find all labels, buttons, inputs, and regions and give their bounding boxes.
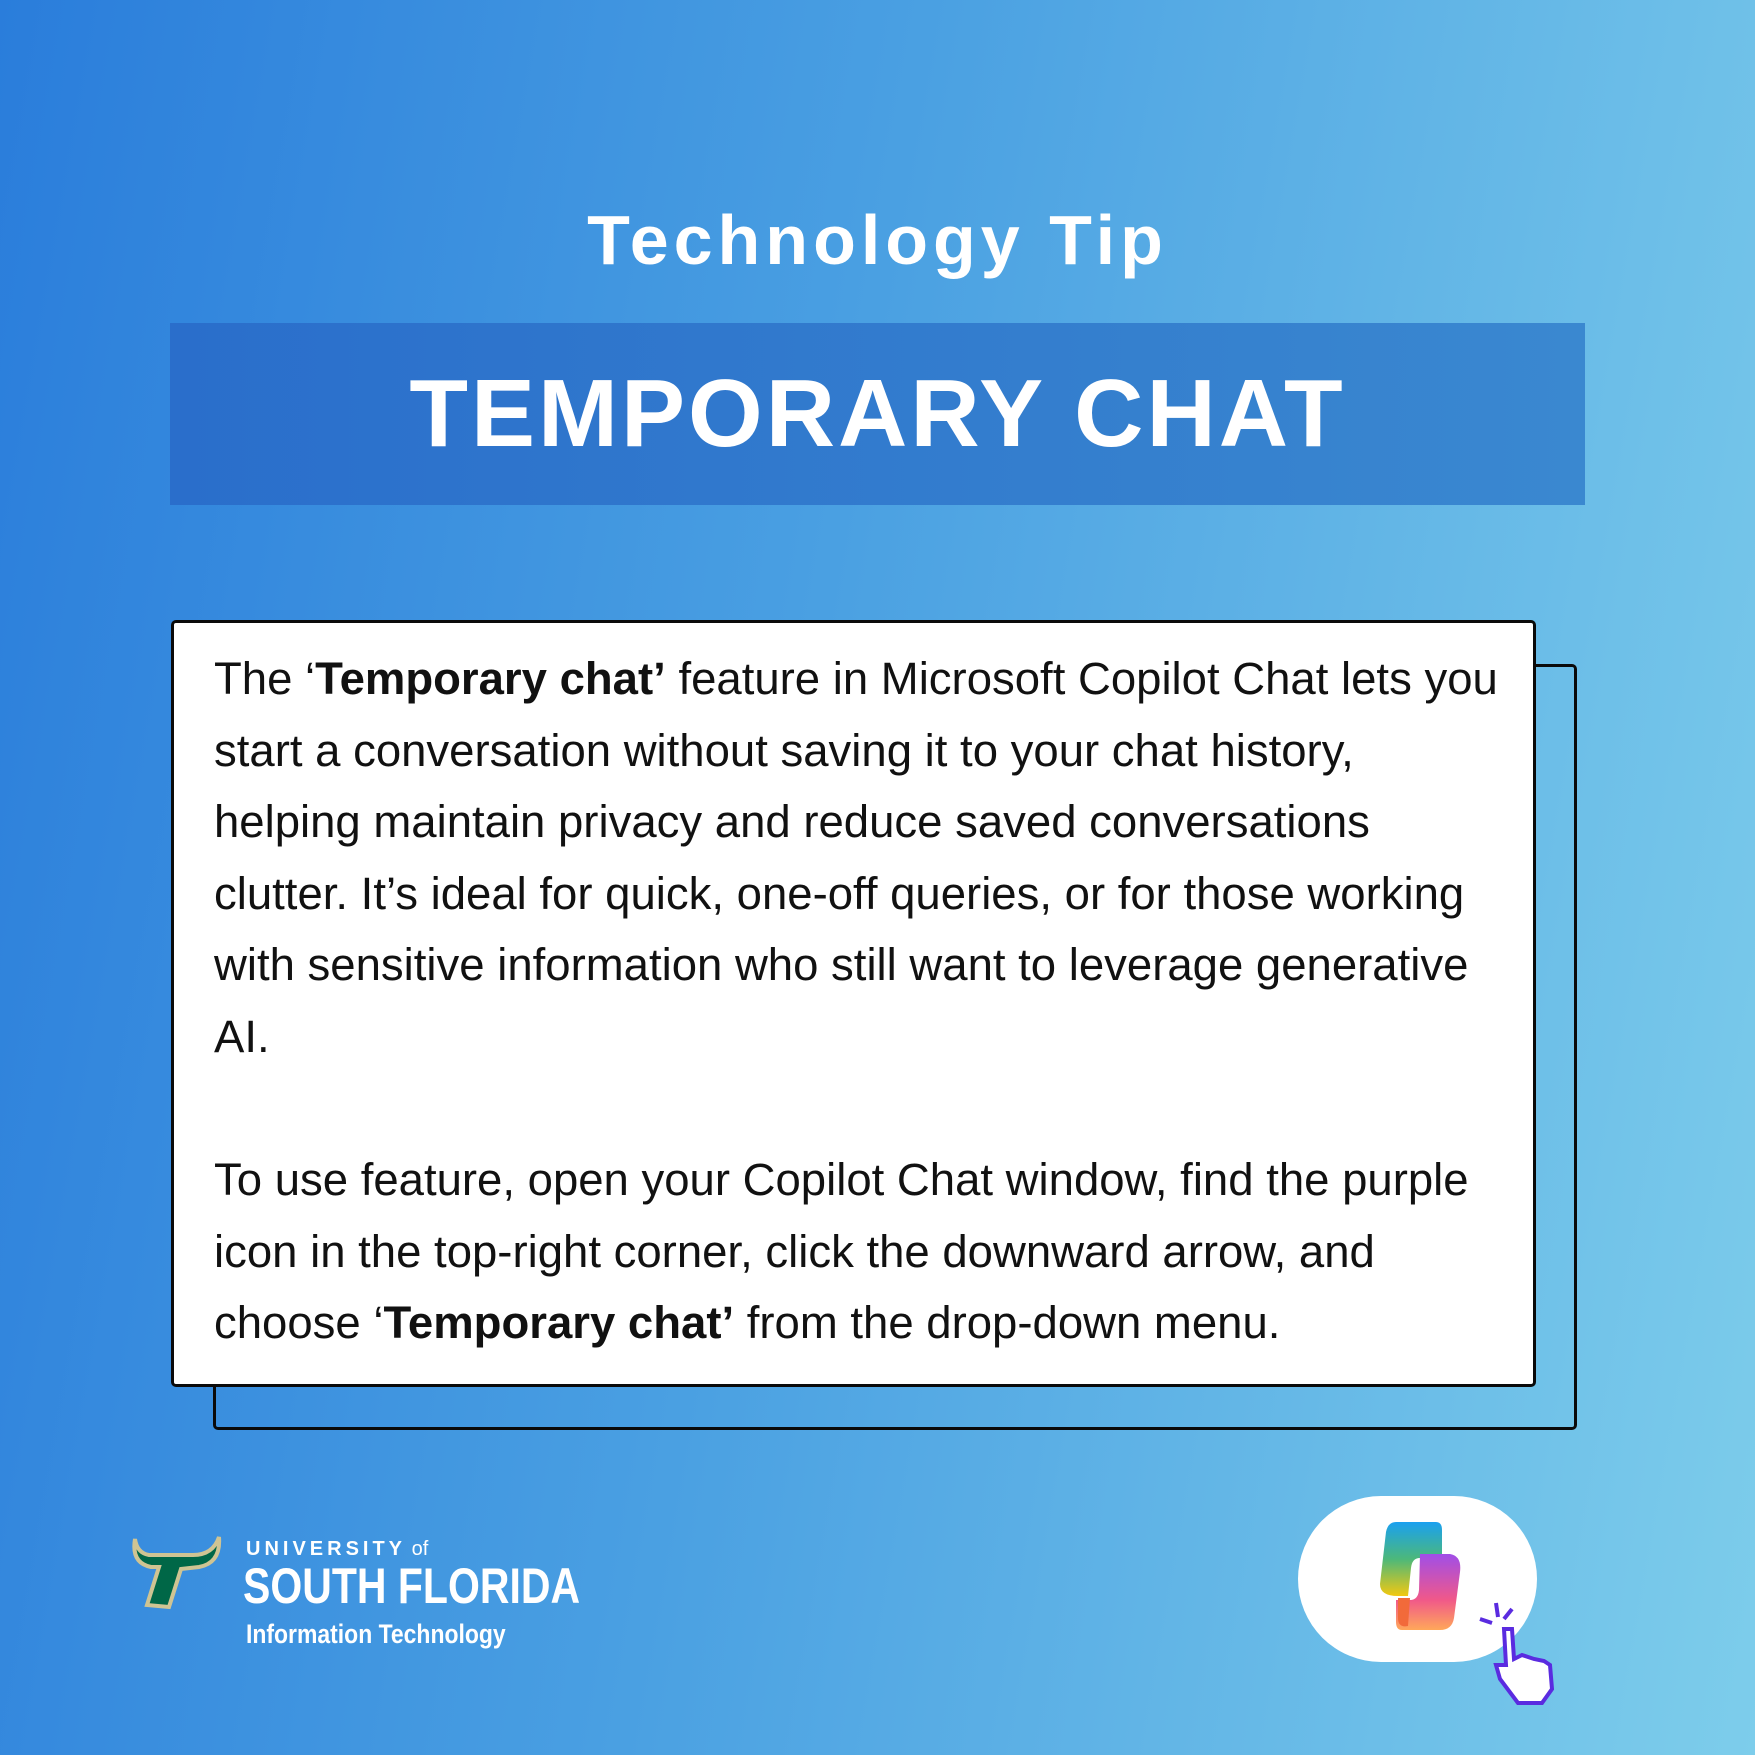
- body text: choose ‘Temporary chat’ from the drop-down menu.: [214, 1297, 1280, 1348]
- body text: To use feature, open your Copilot Chat window, find the purple: [214, 1154, 1469, 1205]
- logo: USF Information Technology: [132, 1536, 580, 1649]
- banner: Temporary Chat: [170, 323, 1585, 505]
- body text: [214, 653, 1498, 1348]
- heading: TEMPORARY CHAT: [409, 360, 1346, 467]
- text: Information Technology: Information Technology: [246, 1619, 506, 1649]
- panel: text card: [171, 620, 1536, 1387]
- body text: AI.: [214, 1011, 270, 1062]
- body text: with sensitive information who still want to leverage generative: [214, 939, 1468, 990]
- body text: helping maintain privacy and reduce saved conversations: [214, 796, 1370, 847]
- body text: clutter. It’s ideal for quick, one-off queries, or for those working: [214, 868, 1464, 919]
- icon: Copilot pill with cursor: [1298, 1496, 1554, 1705]
- body text: start a conversation without saving it to your chat history,: [214, 725, 1354, 776]
- cursor click icon: [1479, 1602, 1554, 1705]
- icon: bull horns: [132, 1536, 222, 1610]
- copilot logo: [1380, 1522, 1460, 1630]
- body text: icon in the top-right corner, click the downward arrow, and: [214, 1226, 1375, 1277]
- text: SOUTH FLORIDA: SOUTH FLORIDA: [243, 1558, 580, 1614]
- title: Technology Tip: Technology Tip: [587, 201, 1168, 279]
- body text: The ‘Temporary chat’ feature in Microsoft Copilot Chat lets you: [214, 653, 1498, 704]
- text: UNIVERSITY of: UNIVERSITY of: [246, 1538, 428, 1560]
- back box shadow: [213, 664, 1577, 1430]
